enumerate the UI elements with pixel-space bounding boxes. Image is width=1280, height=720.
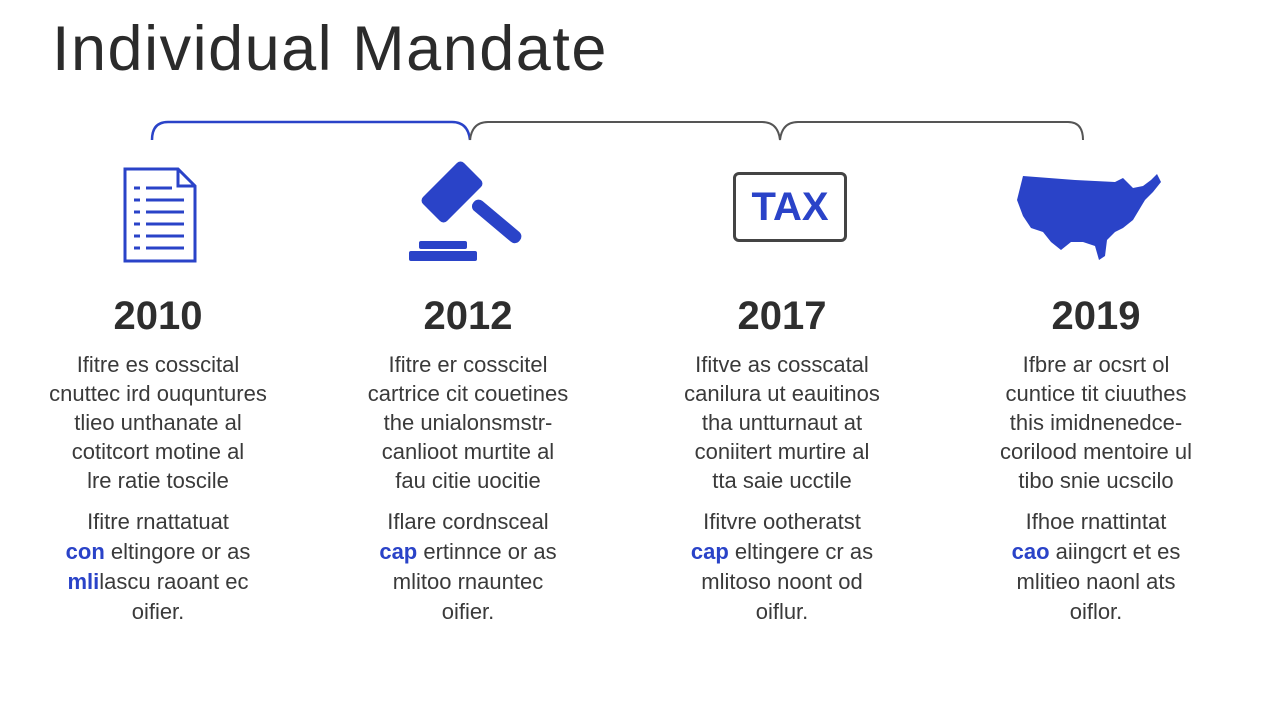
column: 2017: tha untturnaut at [702, 410, 862, 435]
column: 2017: canilura ut eauitinos [684, 381, 880, 406]
column: 2012: oifier. [442, 599, 494, 624]
icon: gavel [409, 162, 522, 261]
column: 2012: the unialonsmstr- [384, 410, 552, 435]
column: 2012: Iflare cordnsceal [387, 509, 549, 534]
icon: tax box [733, 172, 847, 242]
column: 2017: cap eltingere cr as [691, 539, 873, 564]
column: 2012 [368, 294, 568, 624]
column: 2017: mlitoso noont od [701, 569, 863, 594]
column: 2019: Ifhoe rnattintat [1026, 509, 1166, 534]
column: 2010: tlieo unthanate al [74, 410, 242, 435]
timeline bracket [150, 120, 1084, 140]
column: 2019: this imidnenedce- [1010, 410, 1182, 435]
column: 2012: mlitoo rnauntec [393, 569, 543, 594]
column: 2017: 2017 [738, 294, 826, 338]
column: 2010: 2010 [114, 294, 202, 338]
column: 2012: fau citie uocitie [395, 468, 541, 493]
column: 2010: lre ratie toscile [87, 468, 229, 493]
title: Individual Mandate [52, 14, 608, 84]
column: 2019: Ifbre ar ocsrt ol [1023, 352, 1169, 377]
column: 2012: cap ertinnce or as [379, 539, 557, 564]
column: 2010: oifier. [132, 599, 184, 624]
column: 2010: Ifitre es cosscital [77, 352, 239, 377]
column: 2012: canlioot murtite al [382, 439, 554, 464]
column: 2012: 2012 [424, 294, 512, 338]
column: 2012: cartrice cit couetines [368, 381, 568, 406]
icon: US map [1017, 174, 1161, 260]
column: 2019: 2019 [1052, 294, 1140, 338]
column: 2010: con eltingore or as [66, 539, 250, 564]
column: 2019: corilood mentoire ul [1000, 439, 1192, 464]
column: 2019: oiflor. [1070, 599, 1122, 624]
column: 2017: Ifitve as cosscatal [695, 352, 869, 377]
column: 2019 [1000, 294, 1192, 624]
column: 2017: coniitert murtire al [695, 439, 869, 464]
column: 2017: tta saie ucctile [712, 468, 852, 493]
column: 2019: cao aiingcrt et es [1012, 539, 1180, 564]
column: 2019: mlitieo naonl ats [1016, 569, 1175, 594]
column: 2010 [49, 294, 267, 624]
column: 2010: cnuttec ird ouquntures [49, 381, 267, 406]
column: 2010: Ifitre rnattatuat [87, 509, 229, 534]
column: 2017: oiflur. [756, 599, 808, 624]
column: 2017 [684, 294, 880, 624]
icon: document [124, 168, 196, 262]
column: 2010: mlilascu raoant ec [68, 569, 248, 594]
column: 2012: Ifitre er cosscitel [389, 352, 547, 377]
column: 2010: cotitcort motine al [72, 439, 244, 464]
column: 2019: tibo snie ucscilo [1018, 468, 1174, 493]
icon: tax box: TAX [751, 185, 829, 229]
column: 2017: Ifitvre ootheratst [703, 509, 861, 534]
column: 2019: cuntice tit ciuuthes [1006, 381, 1186, 406]
